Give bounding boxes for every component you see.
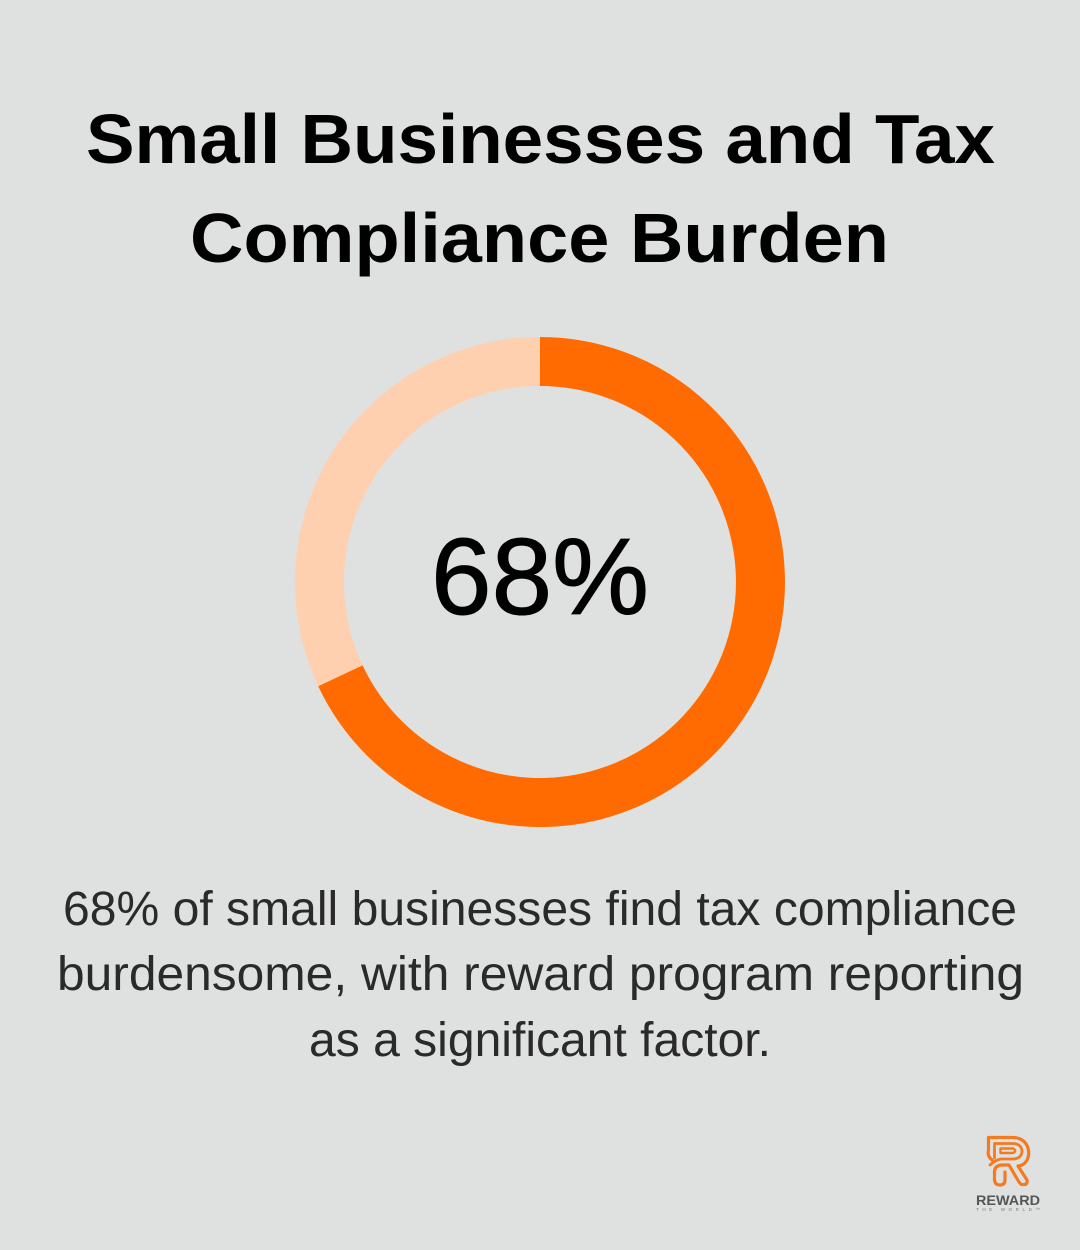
icon: R mark <box>988 1138 1029 1185</box>
description text: 68% of small businesses find tax compliance <box>63 883 1017 936</box>
title: Small Businesses and Tax <box>86 100 995 178</box>
donut center value: 68% <box>431 516 649 638</box>
logo wordmark: REWARD <box>976 1193 1040 1208</box>
description text: burdensome, with reward program reporting <box>57 948 1024 1001</box>
logo: Reward the World <box>976 1138 1040 1212</box>
title <box>86 100 995 277</box>
description text: as a significant factor. <box>309 1014 771 1067</box>
logo tagline: THE WORLD™ <box>976 1207 1040 1212</box>
description text <box>57 883 1024 1067</box>
donut chart: 68% <box>320 362 760 802</box>
title: Compliance Burden <box>190 199 889 277</box>
